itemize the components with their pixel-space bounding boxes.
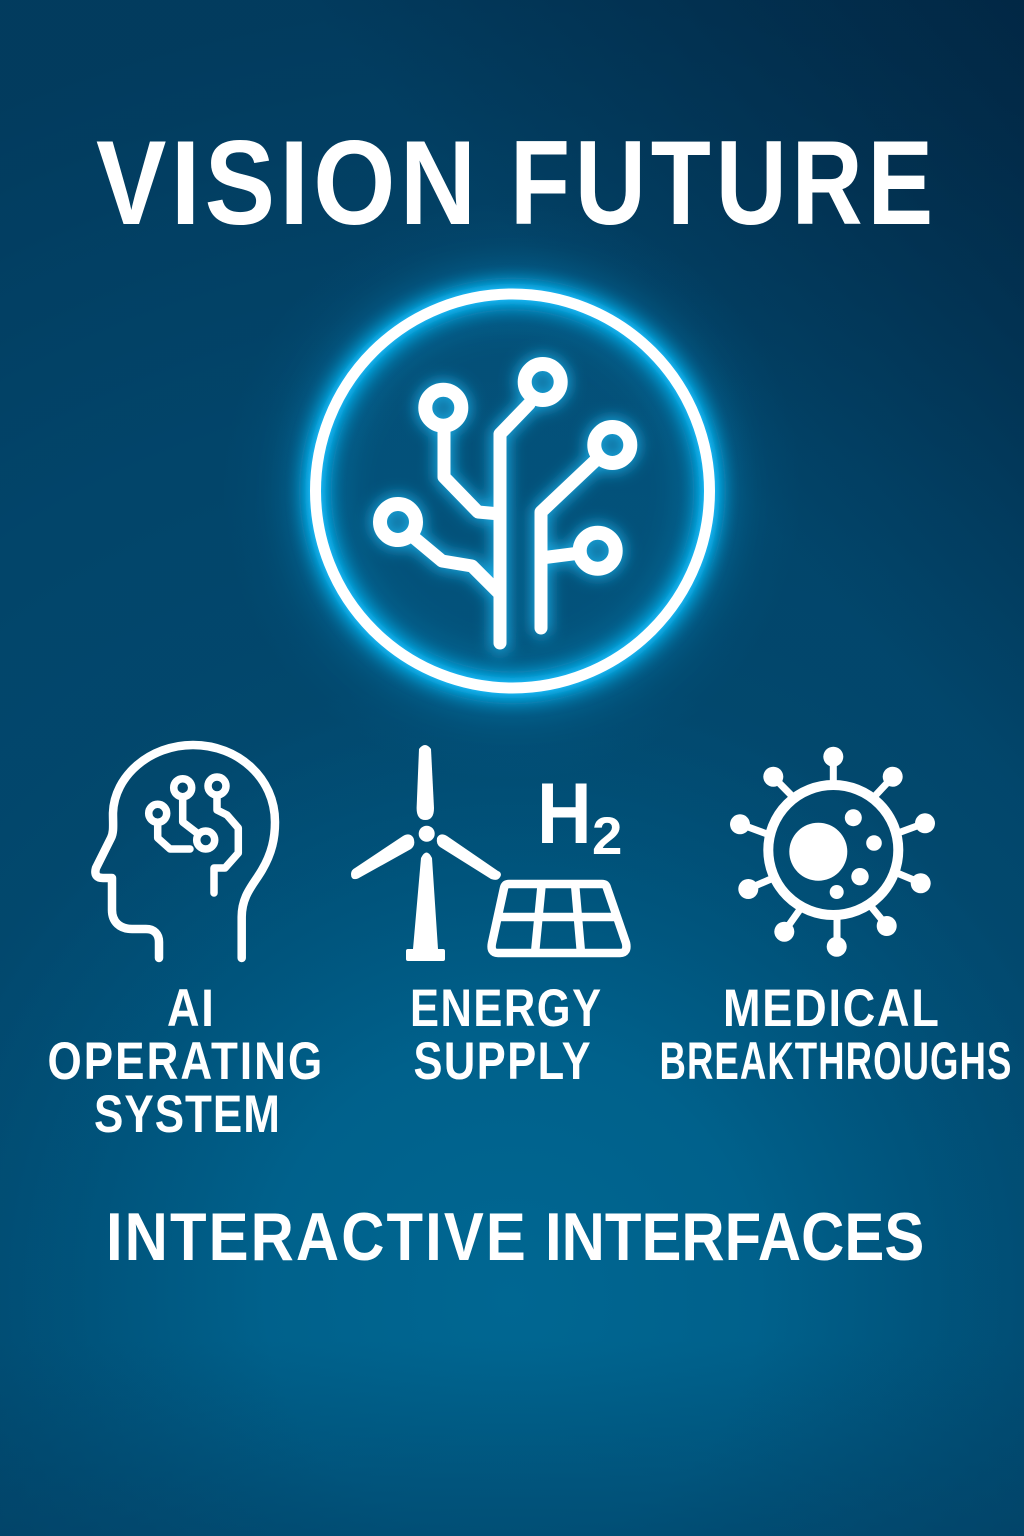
icon: cell	[730, 747, 935, 957]
head outline	[95, 745, 275, 958]
solar panel	[492, 884, 626, 953]
label: energy supply	[410, 979, 601, 1091]
label: medical breakthroughs	[660, 979, 1011, 1091]
icon: glowing circuit tree in ring	[316, 294, 710, 688]
label: AI operating system: AI	[167, 979, 214, 1038]
label: medical breakthroughs: BREAKTHROUGHS	[660, 1031, 1011, 1091]
label: energy supply: ENERGY	[410, 979, 601, 1038]
label: AI operating system	[48, 979, 322, 1144]
label: interactive interfaces: INTERACTIVE	[106, 1198, 526, 1275]
label: energy supply: SUPPLY	[414, 1032, 591, 1091]
head circuits	[149, 777, 238, 893]
circuit tree	[380, 364, 630, 643]
hydrogen subscript: 2	[592, 807, 622, 866]
title: VISION	[96, 116, 476, 249]
spikes	[730, 747, 935, 957]
label: interactive interfaces: INTERFACES	[545, 1198, 924, 1275]
ring glow	[316, 294, 710, 688]
wind turbine	[351, 745, 501, 961]
tree glow	[380, 364, 630, 645]
label: AI operating system: SYSTEM	[94, 1085, 280, 1144]
membrane	[768, 785, 898, 915]
title	[96, 116, 933, 250]
ring	[316, 294, 710, 688]
label: AI operating system: OPERATING	[48, 1032, 322, 1091]
icon: wind turbine, hydrogen and solar panel	[351, 745, 626, 961]
icon: AI head	[95, 745, 275, 958]
label: interactive interfaces	[106, 1198, 924, 1275]
nucleus and vesicles	[789, 809, 882, 899]
title: FUTURE	[510, 117, 933, 250]
hydrogen label: H	[537, 767, 592, 862]
label: medical breakthroughs: MEDICAL	[723, 979, 939, 1038]
